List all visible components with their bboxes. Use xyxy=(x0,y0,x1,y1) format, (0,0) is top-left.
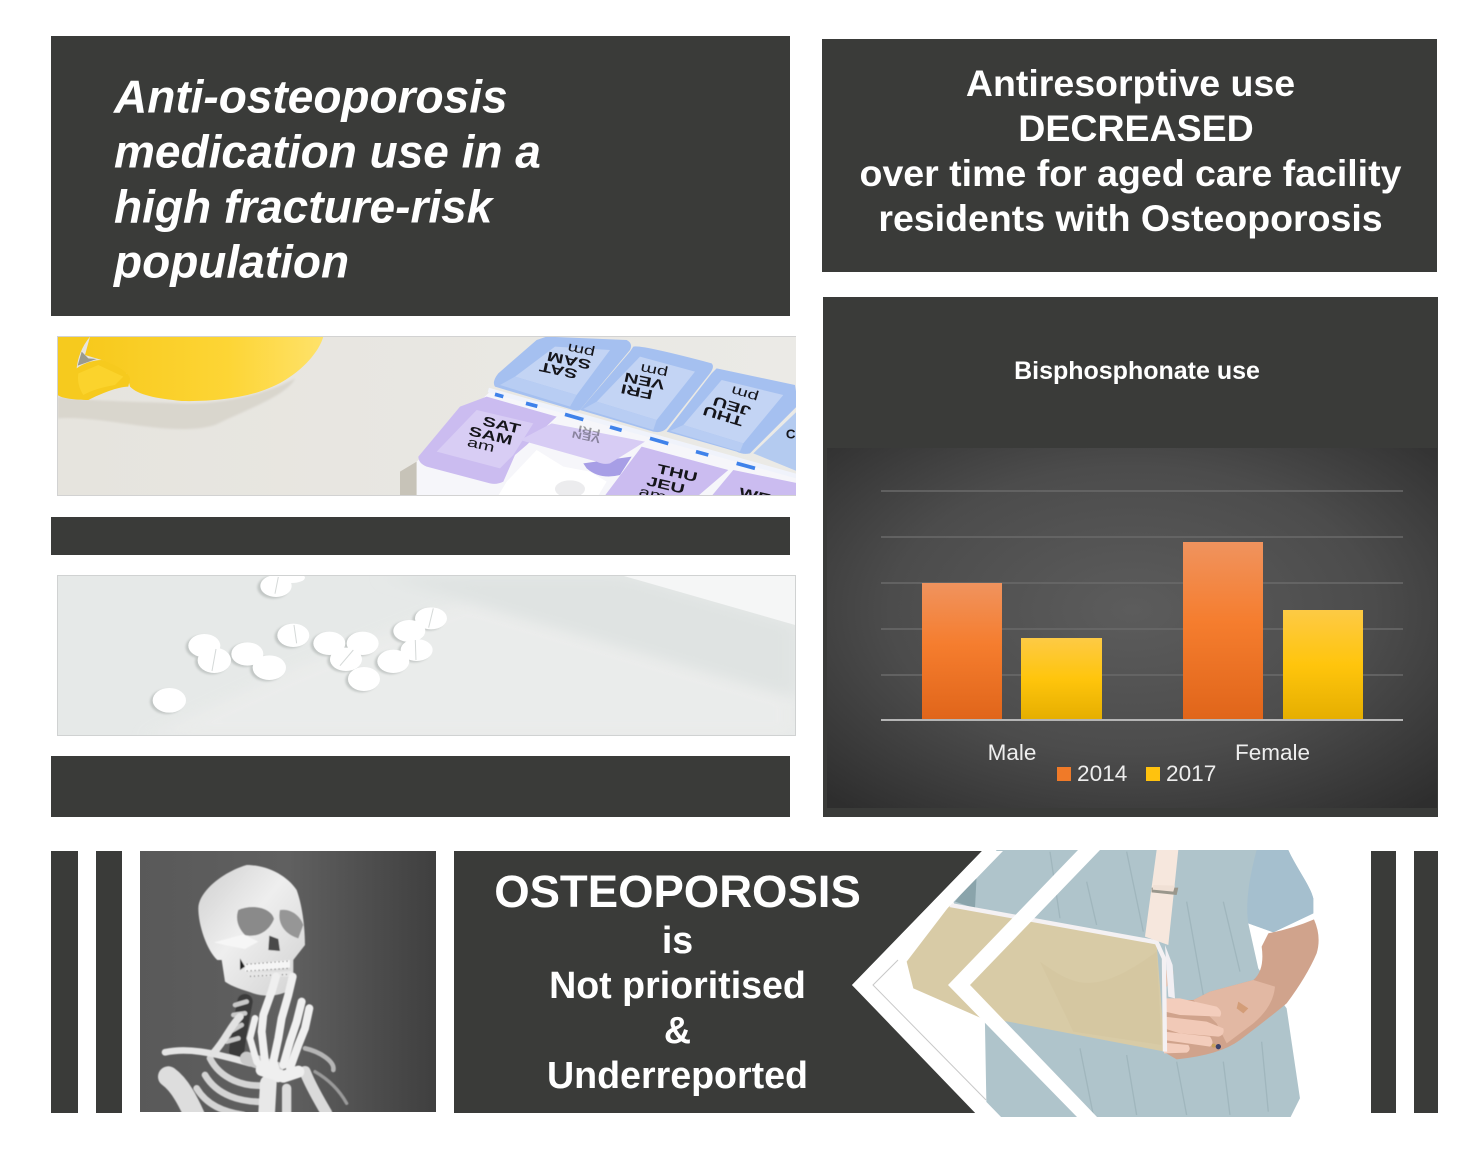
finding text: over time for aged care facility xyxy=(860,152,1402,194)
pill box day labels xyxy=(466,340,796,507)
hinge strip xyxy=(488,390,798,477)
photo: skeleton with hand on chin xyxy=(140,851,436,1117)
legend: 2017 xyxy=(1166,761,1216,786)
sling strap xyxy=(1145,850,1178,998)
skull xyxy=(198,865,305,996)
pill box day labels: FRI xyxy=(577,423,601,438)
pill box day labels: THU xyxy=(656,461,699,485)
pill box day labels: WE xyxy=(738,485,772,507)
bar chart xyxy=(827,448,1437,808)
photo: pill organiser and yellow mug xyxy=(57,336,798,507)
pill box day labels: JEU xyxy=(711,393,753,419)
message text: OSTEOPOROSIS xyxy=(494,866,861,917)
title text: medication use in a xyxy=(114,126,541,178)
pill box day labels: C xyxy=(786,426,796,441)
pill box day labels: am xyxy=(466,434,496,455)
finding text: DECREASED xyxy=(1018,107,1254,149)
chevron stripe across photo xyxy=(948,850,1100,1117)
pill box day labels: VEN xyxy=(623,369,666,392)
divider bar 1 xyxy=(51,517,790,555)
pill box day labels: pm xyxy=(729,383,760,405)
title text: high fracture-risk xyxy=(114,180,495,232)
pill box day labels: VEN xyxy=(571,429,601,445)
pill box day labels: SAT xyxy=(481,414,523,437)
legend xyxy=(1057,761,1216,786)
photo: person with arm in sling xyxy=(907,850,1319,1118)
pill box day labels: pm xyxy=(639,361,669,381)
panel: antiresorptive finding xyxy=(822,39,1437,272)
pill box day labels: JEU xyxy=(645,473,686,497)
title text: Anti-osteoporosis xyxy=(113,70,508,122)
purple lids xyxy=(418,397,798,500)
pill box day labels: THU xyxy=(701,403,745,429)
chart title: Bisphosphonate use xyxy=(1014,357,1260,385)
finding text: residents with Osteoporosis xyxy=(878,197,1383,239)
axis labels: Male xyxy=(988,740,1036,765)
bar: female 2014 xyxy=(1183,542,1263,720)
axis labels xyxy=(988,740,1310,765)
blue lids xyxy=(494,337,798,472)
pill box day labels: SAM xyxy=(467,424,514,448)
left edge bar 2 xyxy=(96,851,122,1113)
photo: scattered white tablets xyxy=(57,572,801,737)
finding text: Antiresorptive use xyxy=(966,62,1295,104)
pill box day labels: SAT xyxy=(537,359,579,382)
message text: Underreported xyxy=(547,1054,808,1096)
pill box day labels: pm xyxy=(566,340,596,361)
message text: & xyxy=(664,1009,691,1051)
bar: female 2017 xyxy=(1283,610,1363,720)
divider bar 2 xyxy=(51,756,790,817)
sling xyxy=(907,905,1165,1052)
bar: male 2017 xyxy=(1021,638,1102,720)
pill box xyxy=(400,337,798,507)
axis labels: Female xyxy=(1235,740,1310,765)
pill box day labels: FRI xyxy=(619,381,654,402)
bar: male 2014 xyxy=(922,583,1002,720)
legend: 2014 xyxy=(1077,761,1127,786)
panel: osteoporosis message xyxy=(454,851,1003,1118)
right edge bar 1 xyxy=(1371,851,1396,1113)
mug xyxy=(58,337,323,429)
panel: bisphosphonate chart xyxy=(823,297,1438,817)
shirt xyxy=(953,850,1313,1118)
ribs and shoulder xyxy=(165,1002,347,1117)
tablets xyxy=(150,572,447,714)
title panel xyxy=(51,36,790,316)
arm and hand xyxy=(1163,919,1319,1059)
left edge bar 1 xyxy=(51,851,78,1113)
message text: Not prioritised xyxy=(549,964,806,1006)
pill box day labels: SAM xyxy=(546,348,592,372)
pill box day labels: am xyxy=(637,484,668,504)
title text: population xyxy=(112,236,349,288)
hand xyxy=(250,977,309,1078)
right edge bar 2 xyxy=(1414,851,1438,1113)
message text: is xyxy=(662,919,693,961)
